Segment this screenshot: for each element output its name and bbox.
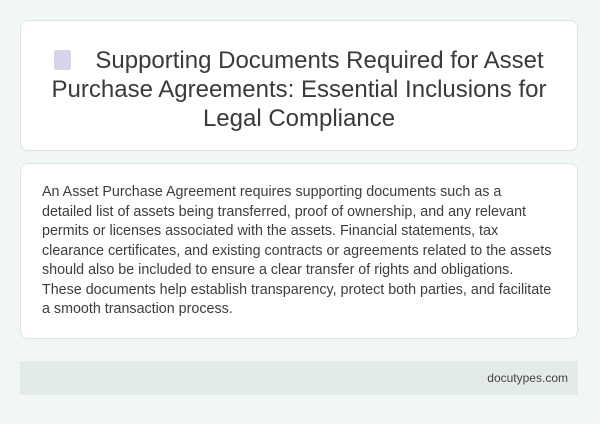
footer: docutypes.com [487,371,568,385]
text block: An Asset Purchase Agreement requires supporting documents such as a detailed list of assets being transferred, proof of ownership, and any relevant permits or licenses associated with the assets. Financial statements, tax clearance certificates, and existing contracts or agreements related to the assets should also be included to ensure a clear transfer of rights and obligations. These documents help establish transparency, protect both parties, and facilitate a smooth transaction process. [42,184,551,317]
footer [20,361,578,395]
panel: title card [20,20,578,151]
panel: description [20,163,578,339]
title: Supporting Documents Required for Asset Purchase Agreements: Essential Inclusions for Legal Compliance [52,47,546,132]
